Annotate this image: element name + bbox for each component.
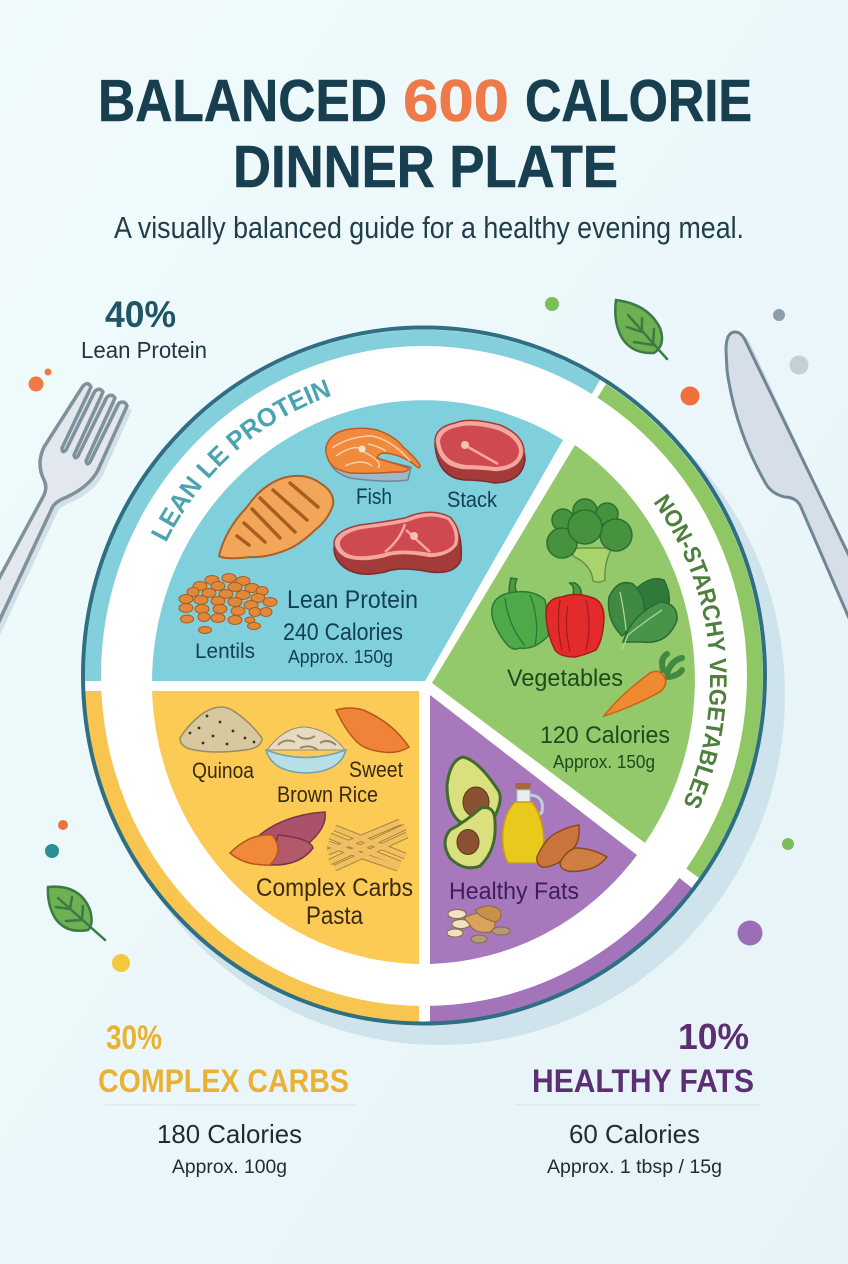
title: BALANCED — [98, 68, 387, 134]
callout: healthy fats: 60 Calories — [569, 1119, 700, 1149]
icon: salmon — [326, 428, 420, 481]
icon: avocados — [445, 757, 500, 868]
label: vegetables wedge: Vegetables — [507, 665, 623, 692]
callout: complex carbs: 30% — [106, 1019, 162, 1057]
icon: large steak — [334, 512, 461, 574]
title: CALORIE — [525, 68, 752, 134]
label: complex carbs wedge — [256, 874, 413, 930]
title: DINNER PLATE — [233, 134, 618, 200]
label: complex carbs wedge: Pasta — [306, 902, 363, 930]
label: brown rice: Brown Rice — [277, 782, 378, 807]
icon: leaf bottom — [48, 887, 105, 940]
wedge: healthy fats — [430, 695, 637, 964]
label: vegetables wedge: 120 Calories — [540, 722, 670, 749]
callout: 40% lean protein — [81, 294, 207, 363]
icon: almonds — [537, 825, 607, 872]
icon: olive oil — [503, 783, 544, 863]
label: vegetables wedge — [507, 665, 670, 772]
icon: brown rice bowl — [266, 727, 346, 773]
callout: 40% lean protein: Lean Protein — [81, 337, 207, 363]
label: lean protein wedge: 240 Calories — [283, 619, 403, 646]
plate shadow — [95, 345, 785, 1045]
outer ring: healthy fats — [430, 680, 692, 1022]
label: fish: Fish — [356, 484, 392, 509]
icon: green pepper — [492, 578, 549, 649]
icon: knife — [726, 332, 848, 643]
label: stack: Stack — [447, 487, 498, 512]
callout: complex carbs: 180 Calories — [157, 1119, 302, 1149]
callout: complex carbs: Approx. 100g — [172, 1157, 287, 1178]
callout: healthy fats — [515, 1016, 760, 1178]
wedge: vegetables — [432, 445, 695, 843]
label: healthy fats wedge: Healthy Fats — [449, 878, 579, 905]
callout: healthy fats: 10% — [678, 1016, 749, 1057]
callout: complex carbs: COMPLEX CARBS — [98, 1063, 349, 1099]
ring label: lean protein: LEAN LE PROTEIN — [150, 379, 331, 542]
ring label: vegetables: NON-STARCHY VEGETABLES — [654, 494, 727, 808]
outer ring: lean protein — [85, 330, 600, 681]
plate inner white — [101, 346, 747, 1006]
label: lean protein wedge: Lean Protein — [287, 586, 418, 614]
outer ring: complex carbs — [85, 691, 419, 1022]
icon: sweet potato — [336, 708, 409, 752]
callout: 40% lean protein: 40% — [105, 294, 176, 335]
callout: complex carbs — [98, 1019, 355, 1178]
plate base — [84, 329, 764, 1023]
callout: healthy fats: Approx. 1 tbsp / 15g — [547, 1157, 722, 1178]
confetti dots — [28, 297, 808, 972]
label: quinoa: Quinoa — [192, 758, 255, 783]
icon: carrot — [604, 654, 682, 716]
plate — [81, 326, 785, 1045]
icon: broccoli — [547, 499, 632, 582]
icon: small steak — [435, 420, 525, 483]
callout: healthy fats: HEALTHY FATS — [532, 1063, 754, 1099]
outer ring: vegetables — [424, 384, 763, 878]
wedge: lean protein — [152, 400, 563, 681]
icon: lentils — [179, 574, 277, 634]
icon: fork — [0, 384, 132, 635]
label: sweet: Sweet — [349, 757, 403, 782]
label: lentils: Lentils — [195, 640, 255, 663]
icon: yam — [230, 812, 325, 865]
icon: red pepper — [546, 583, 604, 657]
wedge: complex carbs — [152, 691, 419, 964]
label: vegetables wedge: Approx. 150g — [553, 752, 655, 772]
label: complex carbs wedge: Complex Carbs — [256, 874, 413, 902]
icon: pasta — [328, 822, 407, 868]
title — [98, 68, 752, 200]
title: 600 — [403, 68, 509, 134]
icon: leaf top — [615, 300, 667, 359]
plate outline — [83, 328, 765, 1024]
label: lean protein wedge: Approx. 150g — [288, 647, 393, 667]
icon: quinoa — [180, 707, 262, 752]
icon: nuts — [447, 906, 510, 943]
subtitle: A visually balanced guide for a healthy evening meal. — [114, 210, 744, 245]
icon: spinach — [609, 579, 677, 650]
label: lean protein wedge — [283, 586, 418, 667]
icon: chicken breast — [219, 476, 333, 558]
